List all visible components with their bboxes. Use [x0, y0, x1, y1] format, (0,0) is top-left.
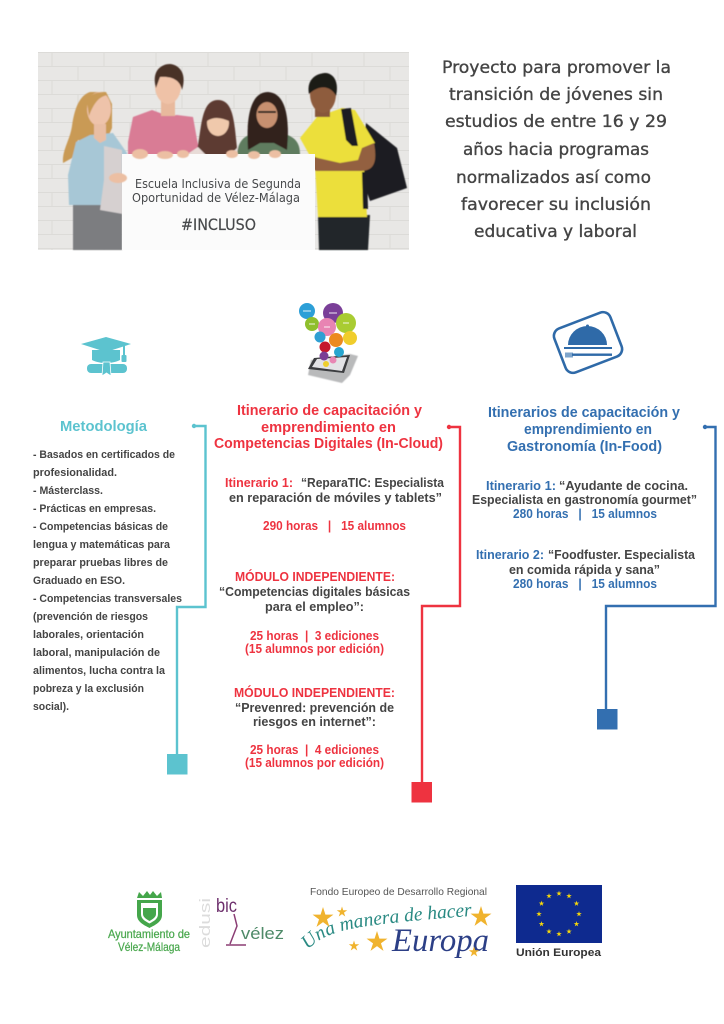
project intro text: normalizados así como — [456, 168, 651, 188]
project intro text — [442, 58, 671, 242]
student 1: blonde girl in denim jacket — [63, 92, 127, 250]
module: competencias digitales básicas: para el empleo”: — [265, 600, 364, 614]
hands on the sign — [109, 149, 281, 183]
module: competencias digitales básicas — [219, 569, 410, 656]
heading: in-cloud: emprendimiento en — [261, 420, 396, 436]
project intro text: educativa y laboral — [474, 222, 637, 242]
logo: ayuntamiento de vélez-málaga: Vélez-Málaga — [118, 940, 180, 954]
heading: in-cloud — [214, 403, 443, 452]
module: prevenred: “Prevenred: prevención de — [235, 701, 394, 715]
student 4: girl with glasses in green top — [237, 92, 300, 155]
panel: gastronomía — [472, 405, 697, 591]
logo: fondo europeo una manera de hacer europa — [300, 886, 492, 959]
student 3: girl with long dark hair — [186, 100, 245, 155]
heading: in-food: Gastronomía (In-Food) — [507, 439, 662, 455]
logo: fondo europeo una manera de hacer europa: Fondo Europeo de Desarrollo Regional — [310, 886, 487, 898]
methodology list: - Prácticas en empresas. — [33, 503, 156, 515]
itinerary 1: reparatic: en reparación de móviles y tablets” — [229, 491, 442, 505]
module: competencias digitales básicas: MÓDULO INDEPENDIENTE: — [235, 569, 395, 584]
photo: students holding a sign — [38, 52, 409, 250]
itinerary 1: ayudante de cocina: Itinerario 1: — [486, 479, 556, 493]
panel: competencias digitales — [214, 403, 445, 770]
logo: unión europea: Unión Europea — [516, 947, 602, 959]
itinerary 1: ayudante de cocina: Especialista en gastronomía gourmet” — [472, 493, 697, 507]
sign text — [132, 176, 301, 234]
module: prevenred: 25 horas | 4 ediciones — [250, 743, 379, 757]
heading: in-cloud: Competencias Digitales (In-Cloud) — [214, 436, 443, 452]
methodology list: laboral, manipulación de — [33, 647, 160, 659]
logo: fondo europeo una manera de hacer europa: Europa — [391, 923, 489, 959]
module: prevenred: (15 alumnos por edición) — [245, 756, 384, 770]
heading: in-food — [488, 405, 680, 455]
itinerary 1: ayudante de cocina — [472, 479, 697, 521]
itinerary 1: ayudante de cocina: 280 horas | 15 alumnos — [513, 507, 657, 521]
methodology list: social). — [33, 701, 69, 713]
itinerary 1: ayudante de cocina: “Ayudante de cocina. — [559, 479, 688, 493]
methodology list: laborales, orientación — [33, 629, 144, 641]
sign text: Escuela Inclusiva de Segunda — [135, 176, 301, 191]
heading: in-cloud: Itinerario de capacitación y — [237, 403, 422, 419]
sign text: #INCLUSO — [181, 215, 256, 234]
itinerary 2: foodfuster — [476, 548, 696, 591]
heading: in-food: Itinerarios de capacitación y — [488, 405, 680, 421]
icon: graduation cap and diploma — [81, 337, 131, 376]
student 2: man in pink shirt — [128, 64, 198, 155]
project intro text: Proyecto para promover la — [442, 58, 671, 78]
itinerary 1: reparatic: Itinerario 1: — [225, 476, 293, 490]
methodology list: profesionalidad. — [33, 467, 117, 479]
methodology list — [33, 449, 182, 713]
connector line: teal — [167, 424, 206, 774]
student 5: man in yellow shirt with backpack — [300, 73, 407, 250]
logo: edusi bic vélez: vélez — [241, 924, 284, 943]
connector line: red — [412, 425, 460, 802]
heading: in-food: emprendimiento en — [524, 422, 652, 438]
methodology list: - Másterclass. — [33, 485, 103, 497]
methodology list: - Competencias transversales — [33, 593, 182, 605]
project intro text: transición de jóvenes sin — [449, 85, 663, 105]
white sign — [122, 154, 315, 250]
logo: ayuntamiento de vélez-málaga — [108, 891, 190, 954]
itinerary 1: reparatic: “ReparaTIC: Especialista — [301, 476, 445, 490]
itinerary 2: foodfuster: en comida rápida y sana” — [509, 563, 660, 577]
itinerary 1: reparatic: 290 horas | 15 alumnos — [263, 519, 406, 533]
connector line: blue — [597, 425, 716, 730]
module: competencias digitales básicas: 25 horas | 3 ediciones — [250, 629, 379, 643]
logo: ayuntamiento de vélez-málaga: Ayuntamiento de — [108, 927, 190, 941]
methodology list: - Basados en certificados de — [33, 449, 175, 461]
itinerary 2: foodfuster: “Foodfuster. Especialista — [548, 548, 696, 562]
methodology list: Graduado en ESO. — [33, 575, 125, 587]
methodology list: (prevención de riesgos — [33, 611, 148, 623]
logo: edusi bic vélez — [197, 896, 284, 948]
methodology list: alimentos, lucha contra la — [33, 665, 166, 677]
itinerary 1: reparatic — [225, 476, 445, 533]
module: prevenred: MÓDULO INDEPENDIENTE: — [234, 685, 395, 700]
project intro text: favorecer su inclusión — [461, 195, 651, 215]
panel: metodología — [33, 418, 182, 713]
project intro text: años hacia programas — [463, 140, 649, 160]
methodology list: preparar pruebas libres de — [33, 557, 168, 569]
icon: food cloche — [552, 310, 624, 375]
itinerary 2: foodfuster: Itinerario 2: — [476, 548, 544, 562]
logo: unión europea — [516, 885, 602, 959]
logo: edusi bic vélez: bic — [216, 896, 237, 917]
methodology list: - Competencias básicas de — [33, 521, 168, 533]
heading: metodología: Metodología — [60, 418, 148, 435]
module: prevenred: riesgos en internet”: — [253, 715, 376, 729]
module: competencias digitales básicas: (15 alumnos por edición) — [245, 642, 384, 656]
project intro text: estudios de entre 16 y 29 — [445, 112, 667, 132]
logo: fondo europeo una manera de hacer europa: Una manera de hacer — [300, 906, 472, 948]
module: competencias digitales básicas: “Competencias digitales básicas — [219, 585, 410, 599]
module: prevenred — [234, 685, 395, 770]
methodology list: lengua y matemáticas para — [33, 539, 171, 551]
itinerary 2: foodfuster: 280 horas | 15 alumnos — [513, 577, 657, 591]
icon: social bubbles over a tablet — [299, 303, 358, 383]
sign text: Oportunidad de Vélez-Málaga — [132, 190, 300, 205]
methodology list: pobreza y la exclusión — [33, 683, 144, 695]
logo: edusi bic vélez: edusi — [197, 898, 214, 948]
